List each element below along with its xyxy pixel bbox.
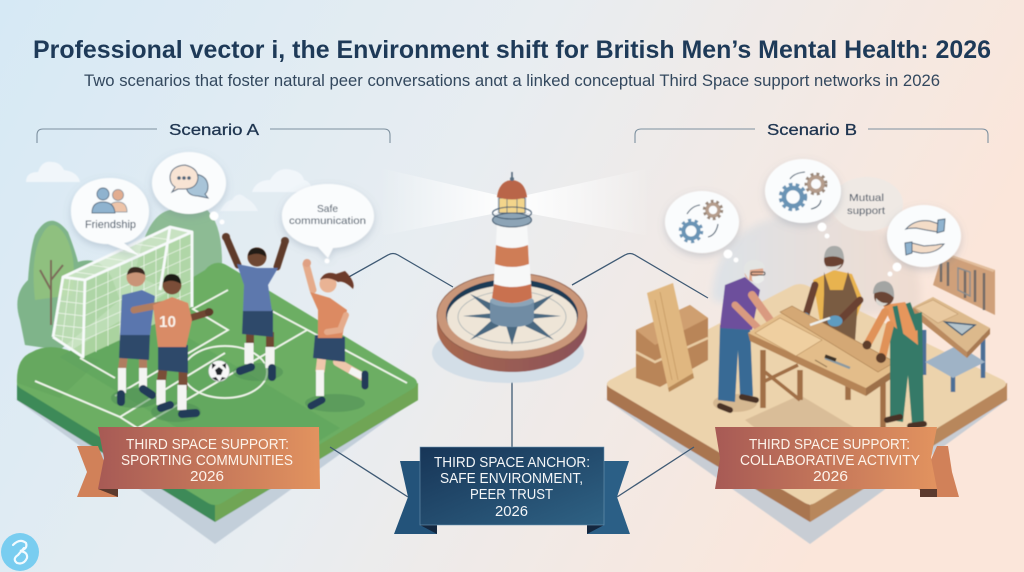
player: number 10: 10: [159, 314, 176, 331]
banner: third space anchor: [394, 447, 630, 534]
pegboard with tools: [933, 252, 995, 315]
heading: Scenario B: [635, 122, 988, 143]
bubble: mutual support: Mutual: [849, 192, 884, 204]
clouds: [26, 162, 312, 211]
banner: sporting communities: THIRD SPACE SUPPORT:: [126, 437, 289, 453]
compass ring: [437, 273, 587, 372]
platform shadow: [14, 398, 418, 544]
bubble: gears centre: [765, 159, 841, 238]
platform sides: [607, 383, 1007, 522]
bubble: conversation: [152, 152, 226, 224]
banner: third space anchor: THIRD SPACE ANCHOR:: [434, 455, 590, 471]
banner: sporting communities: 2026: [190, 469, 224, 485]
panel: Scenario A sports pitch: [14, 152, 418, 544]
bubble: safe communication: [282, 184, 374, 264]
football: [208, 360, 230, 382]
stacked timber and leaning plank: [636, 283, 708, 392]
bubble: safe communication: communication: [289, 215, 366, 227]
title: Professional vector i, the Environment shift for British Men’s Mental Health: 2026: [33, 36, 991, 64]
logo badge: [1, 533, 39, 571]
icon: two people: [92, 188, 127, 213]
banner: third space anchor: 2026: [495, 504, 528, 520]
lighthouse: [490, 172, 534, 327]
player: arms raised: [222, 233, 289, 377]
goal: [53, 227, 192, 357]
banner: collaborative activity: THIRD SPACE SUPPORT:: [749, 437, 910, 453]
banner: collaborative activity: [715, 427, 959, 497]
platform side faces: [17, 383, 418, 522]
compass star: [463, 294, 561, 345]
pitch markings: [35, 290, 407, 452]
bubble: mutual support: [831, 177, 903, 231]
banner: collaborative activity: 2026: [813, 469, 848, 485]
banner: sporting communities: [77, 427, 320, 497]
connector lines to lighthouse: [347, 254, 708, 447]
main workbench: [748, 306, 898, 428]
player: blue shirt, left: [119, 267, 170, 402]
banner: collaborative activity: COLLABORATIVE ACTIVITY: [740, 453, 920, 469]
worker: green overalls: [862, 281, 924, 426]
heading: Scenario B: Scenario B: [767, 122, 857, 139]
banner: third space anchor: PEER TRUST: [470, 487, 553, 503]
bubble: friendship: Friendship: [85, 219, 136, 231]
banner: sporting communities: SPORTING COMMUNITIES: [121, 453, 293, 469]
icon: speech bubbles: [170, 165, 208, 198]
worker: yellow shirt with apron: [800, 246, 863, 342]
side bench: [913, 297, 990, 392]
player: woman in orange: [303, 259, 365, 406]
icon: gears: [680, 201, 722, 242]
player: number 10: [153, 274, 213, 414]
platform top: [607, 284, 1006, 504]
heading: Scenario A: [37, 122, 390, 143]
platform shadow: [604, 398, 1010, 544]
panel: central lighthouse on compass: [432, 172, 587, 383]
connector lines to centre banner: [330, 447, 694, 497]
worker: purple shirt: [713, 260, 775, 412]
haze behind workers: [712, 214, 921, 320]
bubble: helping hands: [887, 205, 961, 276]
icon: gears: [780, 172, 826, 210]
banner: third space anchor: SAFE ENVIRONMENT,: [440, 471, 583, 487]
lighthouse light beams: [380, 168, 650, 236]
panel: Scenario B workshop: [604, 159, 1010, 544]
icon: hands: [905, 219, 945, 255]
platform top: [17, 263, 417, 505]
bubble: friendship: [71, 178, 149, 256]
subtitle: Two scenarios that foster natural peer conversations anαt a linked conceptual Third Space support networks in 2026: [84, 71, 940, 90]
bubble: safe communication: Safe: [317, 203, 338, 215]
compass shadow: [432, 323, 584, 383]
trees and bushes: [17, 202, 222, 350]
bubble: gears left: [665, 191, 739, 262]
ground shadows: [111, 363, 365, 422]
heading: Scenario A: Scenario A: [169, 122, 259, 139]
bubble: mutual support: support: [847, 205, 885, 217]
